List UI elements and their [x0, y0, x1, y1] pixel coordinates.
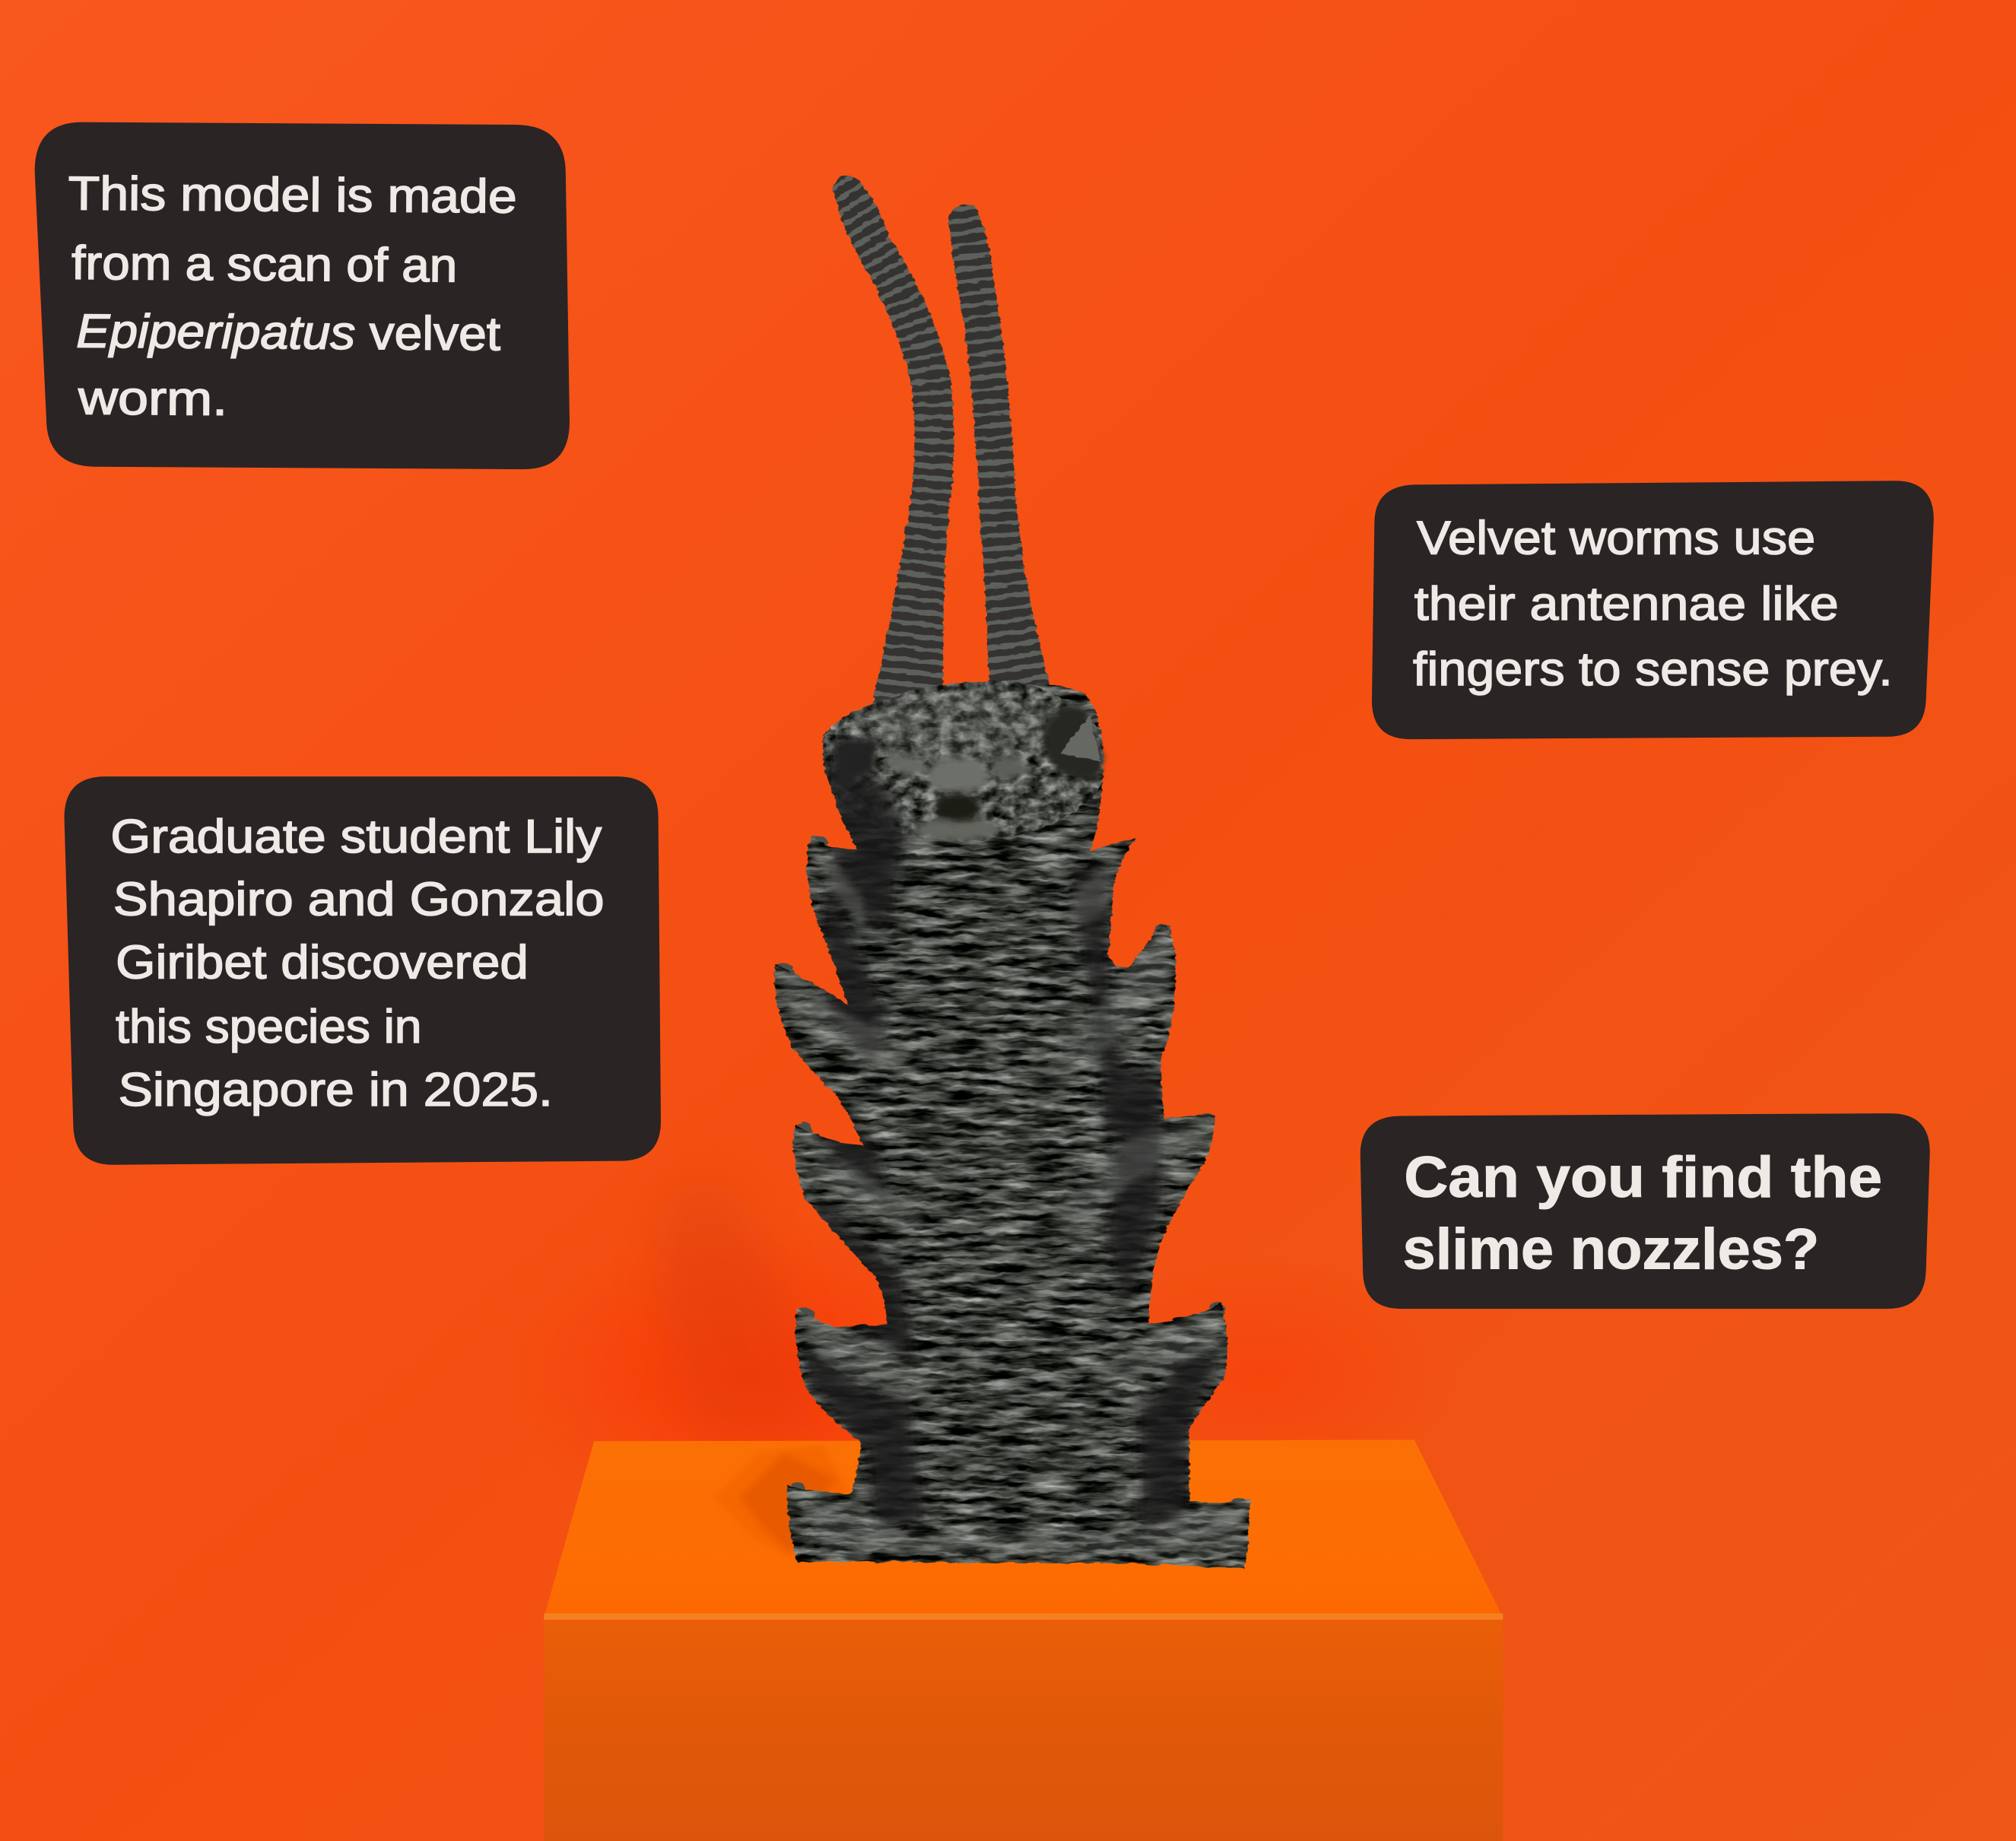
pedestal top: [544, 1440, 1502, 1617]
callout text: [1413, 512, 1893, 696]
callout text: fingers to sense prey.: [1413, 643, 1893, 696]
callout text: this species in: [116, 1000, 422, 1053]
horizontal ridge texture: [759, 668, 1273, 1581]
limb highlights: [775, 838, 1245, 1556]
callout text: Epiperipatus velvet: [76, 304, 500, 360]
red light glow behind the model: [501, 1221, 1452, 1530]
callout: antennae: [1372, 481, 1934, 739]
body with texture: [759, 668, 1273, 1581]
callout text: [110, 810, 605, 1116]
left eye lobe: [833, 739, 877, 787]
limb tip knobs: [774, 836, 1249, 1516]
callout text: Giribet discovered: [116, 936, 529, 989]
face: [833, 693, 1103, 841]
pedestal edge highlight: [544, 1614, 1503, 1620]
pedestal: [544, 1440, 1503, 1841]
callout: model scan: [35, 122, 570, 469]
right antenna: [948, 204, 1049, 685]
callout text: Can you find the: [1404, 1145, 1882, 1210]
head bump texture: [822, 681, 1104, 841]
callout text: Singapore in 2025.: [119, 1063, 553, 1116]
callout text: their antennae like: [1414, 577, 1839, 630]
callout text: This model is made: [68, 167, 517, 224]
right eye lobe: [1044, 705, 1103, 782]
callout text: Graduate student Lily: [110, 810, 602, 863]
snout lumps: [884, 751, 1027, 841]
callout text: from a scan of an: [71, 236, 458, 292]
model shadow on wall: [656, 1179, 817, 1437]
callout text: slime nozzles?: [1403, 1217, 1819, 1282]
head light area: [849, 693, 1067, 760]
velvet worm model: [759, 167, 1273, 1581]
pedestal top shadow: [713, 1445, 849, 1558]
callout text: [67, 167, 517, 427]
pedestal front face: [544, 1621, 1503, 1841]
callout text: worm.: [78, 371, 227, 426]
dark side shading: [800, 758, 1221, 1530]
callout text: Shapiro and Gonzalo: [113, 873, 605, 926]
callout: discovery: [65, 776, 661, 1165]
left antenna: [832, 175, 955, 704]
callout: slime nozzles question: [1360, 1113, 1930, 1309]
callout text: [1403, 1145, 1882, 1282]
callout text: Velvet worms use: [1417, 512, 1815, 565]
mouth: [935, 793, 981, 821]
